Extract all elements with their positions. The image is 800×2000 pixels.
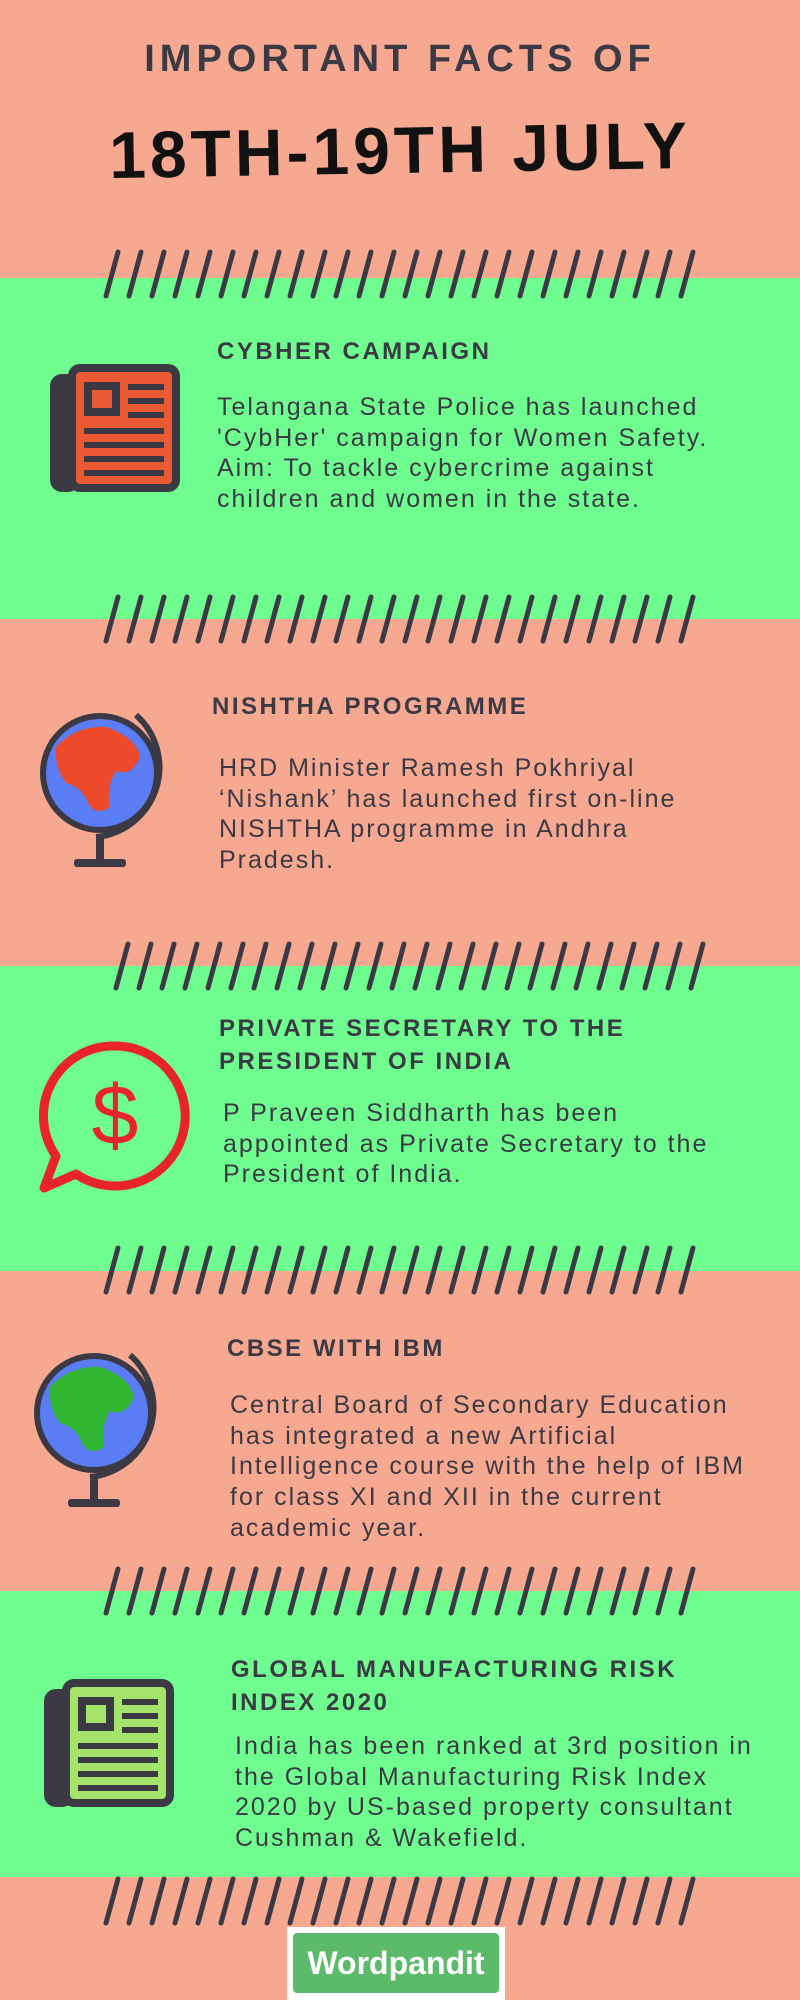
heading: GLOBAL MANUFACTURING RISK [231,1656,677,1683]
slashes 1 [104,250,696,298]
text [219,754,676,874]
icon: newspaper green [44,1679,174,1807]
subtitle date: 18TH-19TH JULY [109,108,691,192]
panel: cybher campaign [50,338,708,513]
text: 'CybHer' campaign for Women Safety. [217,424,708,452]
panel: global manufacturing risk index [44,1656,753,1852]
text: academic year. [230,1514,426,1542]
heading: PRIVATE SECRETARY TO THE [219,1015,625,1042]
icon: globe red [40,712,163,867]
text: Pradesh. [219,846,335,874]
panel: private secretary [38,1015,708,1192]
slashes 6 [104,1876,696,1926]
text: India has been ranked at 3rd position in [235,1732,753,1760]
heading: NISHTHA PROGRAMME [212,693,528,720]
logo: wordpandit: Wordpandit [307,1945,485,1981]
text: has integrated a new Artificial [230,1422,617,1450]
heading [231,1656,677,1716]
text: Cushman & Wakefield. [235,1824,528,1852]
heading: PRESIDENT OF INDIA [219,1048,513,1075]
panel: cbse with ibm [34,1335,745,1542]
slashes 2 [104,594,696,644]
panel: nishtha programme [40,693,676,874]
text: Central Board of Secondary Education [230,1391,729,1419]
text: HRD Minister Ramesh Pokhriyal [219,754,635,782]
text: President of India. [223,1160,463,1188]
text: NISHTHA programme in Andhra [219,815,629,843]
icon: dollar speech bubble: $ [92,1068,138,1162]
text: ‘Nishank’ has launched first on-line [219,785,676,813]
slashes 5 [104,1566,696,1616]
text: Aim: To tackle cybercrime against [217,454,655,482]
text: children and women in the state. [217,485,641,513]
text: P Praveen Siddharth has been [223,1099,619,1127]
icon: dollar speech bubble [38,1042,190,1192]
text: for class XI and XII in the current [230,1483,663,1511]
text [230,1391,745,1542]
text: the Global Manufacturing Risk Index [235,1763,708,1791]
text: 2020 by US-based property consultant [235,1793,734,1821]
heading [219,1015,625,1075]
text: Intelligence course with the help of IBM [230,1452,745,1480]
slashes 4 [104,1246,696,1294]
text: appointed as Private Secretary to the [223,1130,708,1158]
text [235,1732,753,1852]
heading: CYBHER CAMPAIGN [217,338,491,365]
text [223,1099,708,1188]
heading: INDEX 2020 [231,1689,389,1716]
icon: newspaper red [50,364,180,492]
text [217,393,708,513]
heading: CBSE WITH IBM [227,1335,445,1362]
logo: wordpandit [287,1927,505,2000]
slashes 3 [114,942,706,990]
title: IMPORTANT FACTS OF [144,38,656,80]
text: Telangana State Police has launched [217,393,698,421]
icon: globe green [34,1352,157,1507]
